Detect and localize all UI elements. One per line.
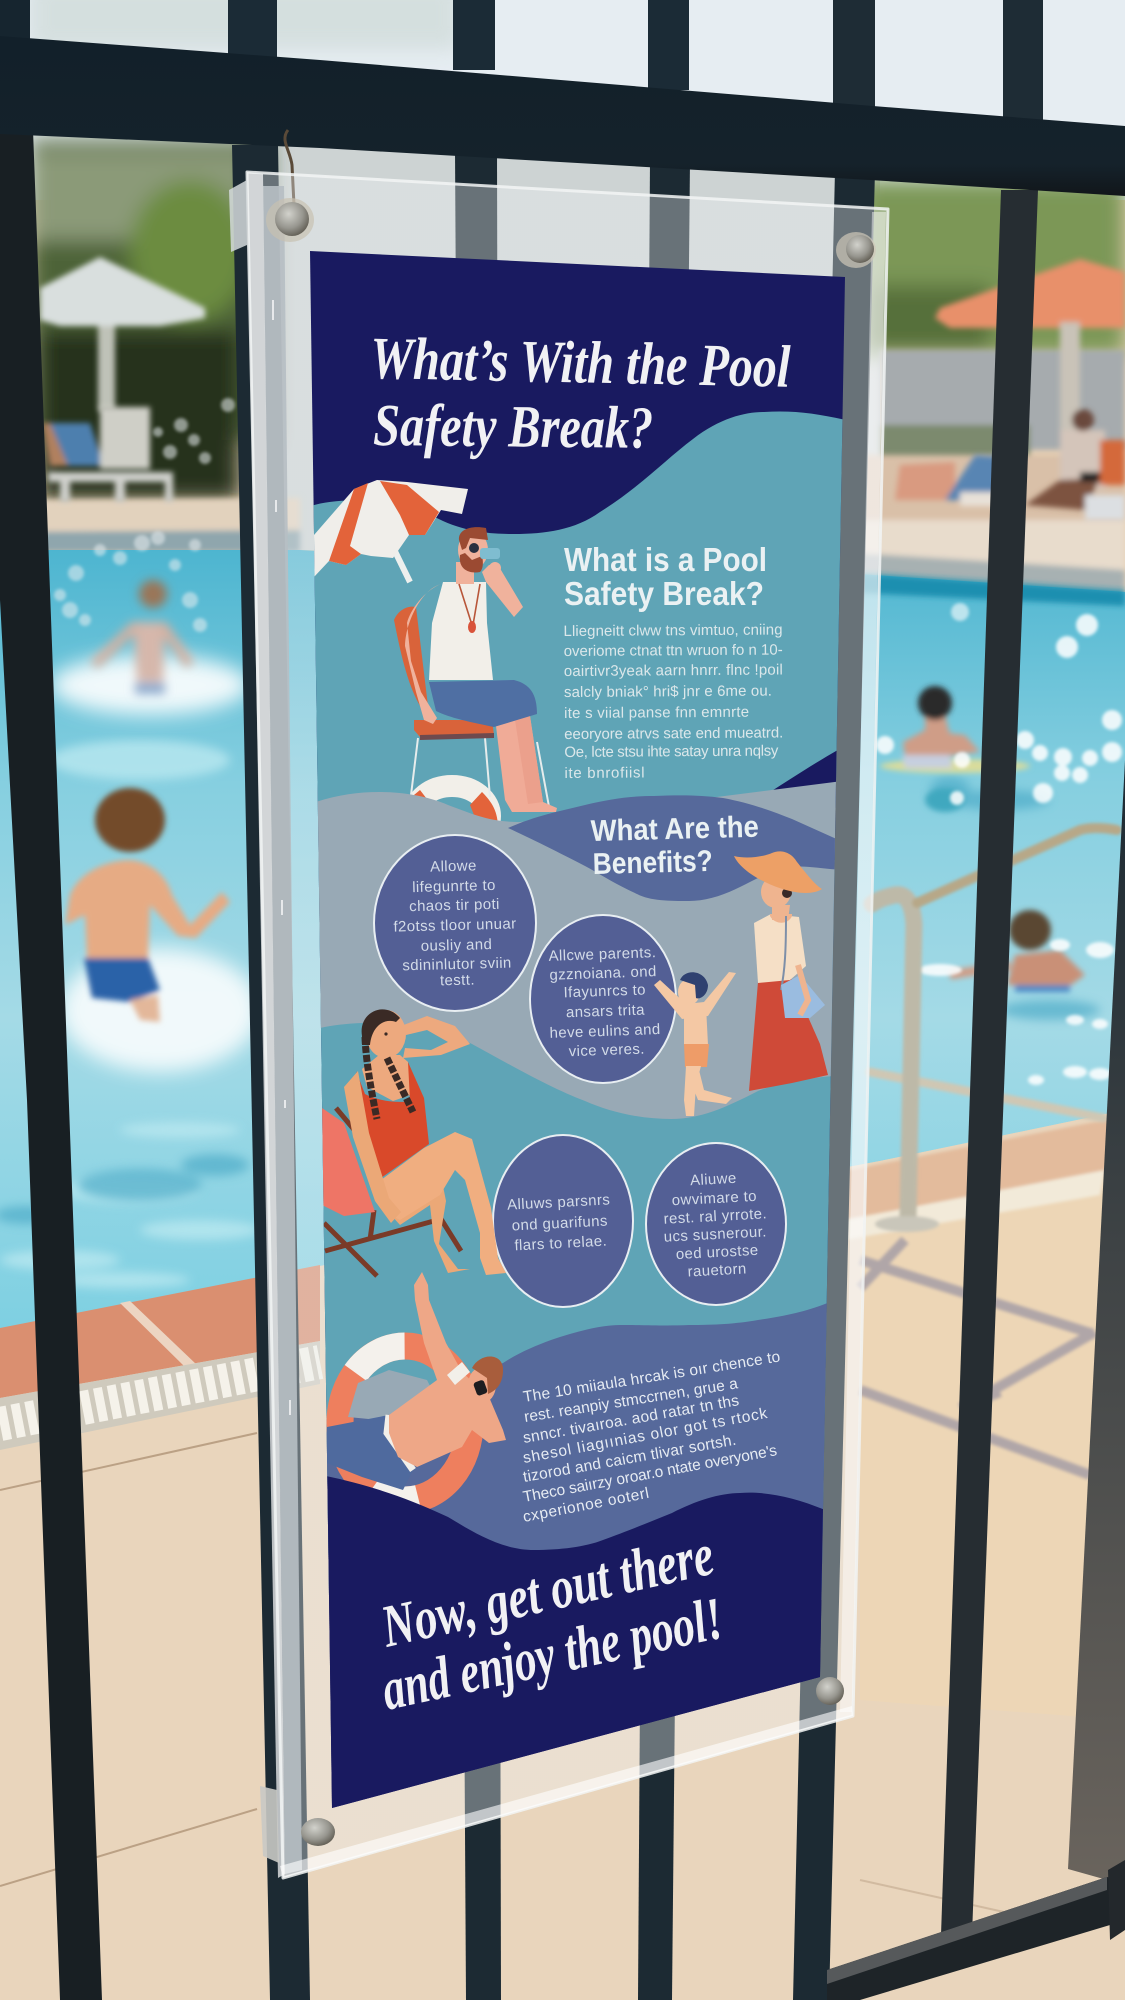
life ring — [412, 775, 501, 821]
fence top rail — [0, 36, 1125, 196]
what is body text — [563, 621, 784, 782]
bottom navy wave — [327, 1476, 823, 1808]
deck back strips — [0, 455, 1125, 592]
circle: benefit 3 — [493, 1135, 633, 1307]
circle: benefit 2: vice veres. — [568, 1041, 645, 1060]
what is heading: Safety Break? — [564, 575, 764, 612]
break paragraph: rest. reanpiy stmccrnen, grue a — [523, 1375, 739, 1426]
benefits heading: What Are the — [590, 811, 759, 848]
circle: benefit 4 — [646, 1143, 786, 1305]
wooden fence right — [880, 350, 1125, 465]
pool handrail — [870, 828, 1117, 1232]
coping tiles right — [840, 1118, 1115, 1240]
circle: benefit 1 — [374, 835, 536, 1011]
loungers left — [42, 407, 173, 502]
deck — [0, 1110, 1125, 2000]
closing line: and enjoy the pool! — [376, 1585, 729, 1723]
umbrella — [314, 480, 468, 582]
title — [374, 337, 791, 460]
circle: benefit 1: f2otss tloor unuar — [393, 915, 517, 936]
swimmer far left with splash — [50, 580, 250, 715]
woman with hat — [734, 851, 828, 1091]
swimmers right — [880, 686, 1085, 992]
bolt: top left — [266, 198, 314, 242]
circle: benefit 1: chaos tir poti — [409, 896, 500, 915]
what is heading — [564, 541, 767, 612]
break paragraph: cxperionoe ooterl — [522, 1485, 650, 1526]
trees left — [30, 140, 270, 500]
lifeguard — [394, 527, 557, 812]
circle: benefit 2: ansars trita — [566, 1002, 645, 1021]
circle: benefit 4: owvimare to — [671, 1188, 757, 1209]
fence shadows on deck — [860, 1240, 1095, 1475]
break paragraph: The 10 miiaula hrcak is oır chence to — [522, 1348, 781, 1406]
circle: benefit 2: Ifayunrcs to — [563, 982, 646, 1001]
what is body text: Oe, lcte stsu ihte satay unra nqlsy — [564, 743, 779, 761]
bolt: top right — [836, 232, 876, 268]
circle: benefit 3: ond guarifuns — [511, 1213, 608, 1235]
circle: benefit 4: oed urostse — [675, 1242, 759, 1263]
boy in pool — [60, 788, 260, 1072]
teal section — [305, 411, 850, 1600]
circle: benefit 1: lifegunrte to — [412, 877, 496, 896]
what is body text: overiome ctnat ttn wruon fo n 10- — [564, 641, 783, 660]
circle: benefit 4: rest. ral yrrote. — [663, 1205, 767, 1228]
what is body text: ite bnrofiisl — [564, 764, 645, 782]
circle: benefit 2: heve eulins and — [549, 1021, 661, 1042]
lower slate wave — [305, 1302, 830, 1600]
title: What’s With the Pool — [370, 325, 791, 400]
circle: benefit 3: flars to relae. — [514, 1233, 608, 1254]
trees right — [860, 180, 1125, 355]
bolt: bottom left — [301, 1818, 335, 1846]
break paragraph: tizorod and caicm tlivar sortsh. — [522, 1432, 737, 1486]
circle: benefit 2: Allcwe parents. — [548, 944, 657, 965]
pool sparkles — [876, 603, 1122, 1085]
wire hook — [285, 130, 294, 205]
title: Safety Break? — [373, 392, 654, 461]
grey wave — [305, 780, 850, 1119]
woman in deck chair — [322, 1009, 506, 1276]
circle: benefit 2 — [530, 915, 676, 1083]
circle: benefit 4: Aliuwe — [690, 1170, 737, 1189]
closing line: Now, get out there — [375, 1521, 720, 1660]
closing line — [383, 1546, 720, 1710]
benefits heading — [590, 816, 758, 874]
break paragraph: Theco saiırzy oroar.o ntate overyone's — [522, 1442, 779, 1506]
what is body text: eeoryore atrvs sate end mueatrd. — [564, 724, 783, 743]
bokeh dots left — [54, 398, 235, 632]
what is body text: salcly bniak° hri$ jnr e 6me ou. — [564, 683, 772, 701]
break paragraph: snncr. tivaıroa. aod ratar tn ths — [522, 1392, 741, 1447]
coping tiles left — [0, 1265, 320, 1450]
slate heading wave — [508, 795, 850, 901]
orange umbrella and people right — [895, 259, 1125, 520]
acrylic tab bottom — [260, 1786, 279, 1863]
what is body text: ite s viial panse fnn emnrte — [564, 704, 749, 722]
break paragraph: shesol Iiagıınias olor got ts rtock — [522, 1405, 769, 1467]
pool water — [0, 550, 1125, 1330]
benefits heading: Benefits? — [592, 845, 713, 881]
umbrella white — [40, 257, 205, 411]
what is body text: oairtivr3yeak aarn hnrr. flnc !poil — [564, 661, 783, 680]
circle: benefit 4: rauetorn — [687, 1260, 747, 1281]
circle: benefit 1: sdininlutor sviin — [402, 955, 512, 974]
child — [654, 972, 736, 1116]
what is body text: Lliegneitt clww tns vimtuo, cniing — [563, 621, 783, 640]
fence bottom rail — [827, 1860, 1125, 2000]
circle: benefit 3: Alluws parsnrs — [507, 1191, 611, 1214]
break paragraph — [522, 1348, 781, 1526]
deck joints — [0, 1433, 1040, 1920]
what is heading: What is a Pool — [564, 541, 767, 578]
circle: benefit 1: Allowe — [430, 857, 477, 876]
circle: benefit 1: ousliy and — [421, 936, 493, 955]
acrylic panel — [229, 172, 888, 1878]
circle: benefit 4: ucs susnerour. — [663, 1223, 767, 1246]
circle: benefit 2: gzznoiana. ond — [549, 963, 657, 984]
bolt: bottom right — [816, 1677, 844, 1705]
floating man on ring — [327, 1272, 506, 1500]
acrylic tab top — [229, 180, 247, 252]
circle: benefit 1: testt. — [440, 972, 475, 989]
poster — [300, 240, 860, 1850]
navy corner — [773, 750, 836, 860]
